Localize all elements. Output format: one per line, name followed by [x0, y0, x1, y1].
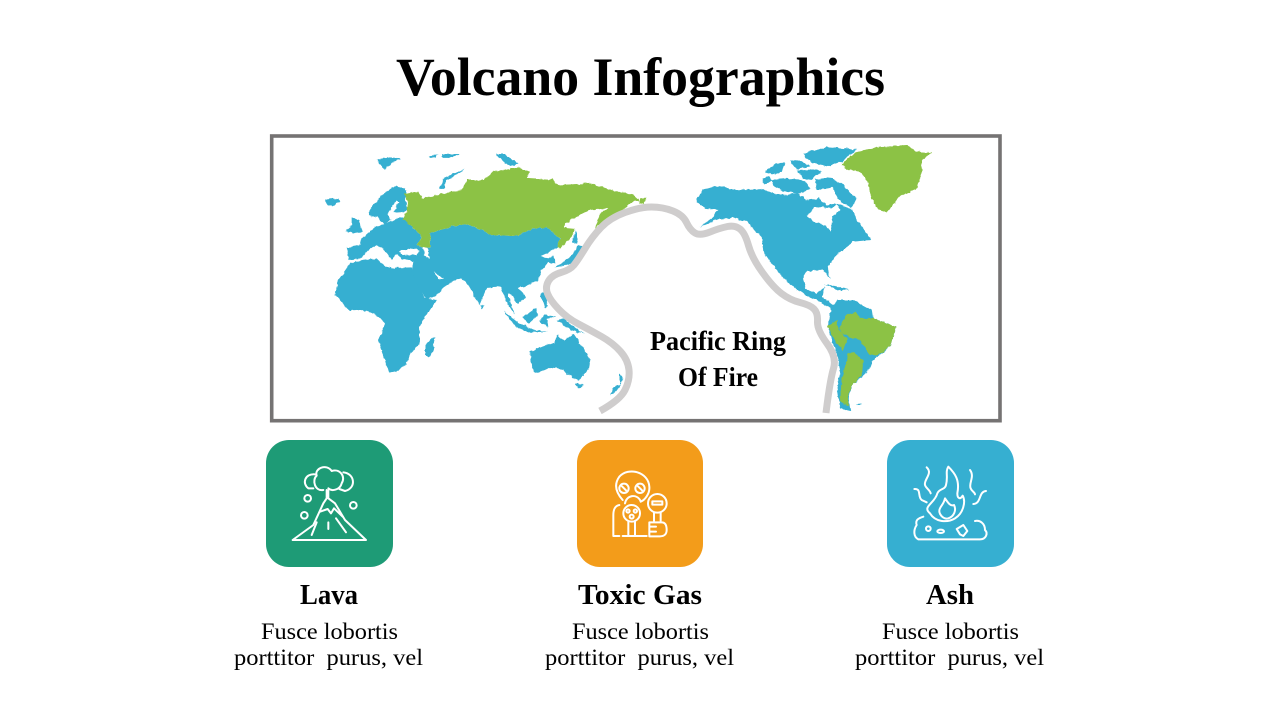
title: Volcano Infographics — [396, 47, 885, 107]
icon: gas mask figure — [577, 440, 703, 567]
heading: ash: Ash — [926, 579, 974, 611]
text: ash description — [855, 619, 1044, 670]
text: lava description: Fusce lobortis — [261, 619, 398, 644]
map label: Of Fire — [678, 362, 758, 392]
text: lava description — [234, 619, 423, 670]
panel: toxic gas — [545, 440, 734, 670]
map: South America highlighted — [840, 312, 897, 357]
panel: ash — [855, 440, 1044, 670]
world map landmasses — [324, 145, 932, 412]
map label — [650, 326, 786, 392]
map: Greenland highlighted — [842, 145, 932, 213]
map: Russia highlighted — [403, 167, 640, 248]
icon: burning ash — [887, 440, 1014, 567]
map label: Pacific Ring — [650, 326, 786, 356]
icon: volcano — [266, 440, 393, 567]
map: Americas and Greenland — [640, 145, 932, 412]
pacific ring of fire line — [546, 207, 834, 413]
text: toxic gas description: Fusce lobortis — [572, 619, 709, 644]
map frame — [272, 136, 1000, 421]
panel: world map — [272, 136, 1000, 421]
text: toxic gas description — [545, 619, 734, 670]
panel: lava — [234, 440, 423, 670]
heading: toxic gas: Toxic Gas — [578, 579, 702, 611]
text: ash description: Fusce lobortis — [882, 619, 1019, 644]
map: Europe, Asia, Africa and Australia — [324, 154, 640, 395]
text: toxic gas description: porttitor purus, vel — [545, 645, 734, 670]
heading: lava: Lava — [300, 579, 358, 611]
text: lava description: porttitor purus, vel — [234, 645, 423, 670]
text: ash description: porttitor purus, vel — [855, 645, 1044, 670]
